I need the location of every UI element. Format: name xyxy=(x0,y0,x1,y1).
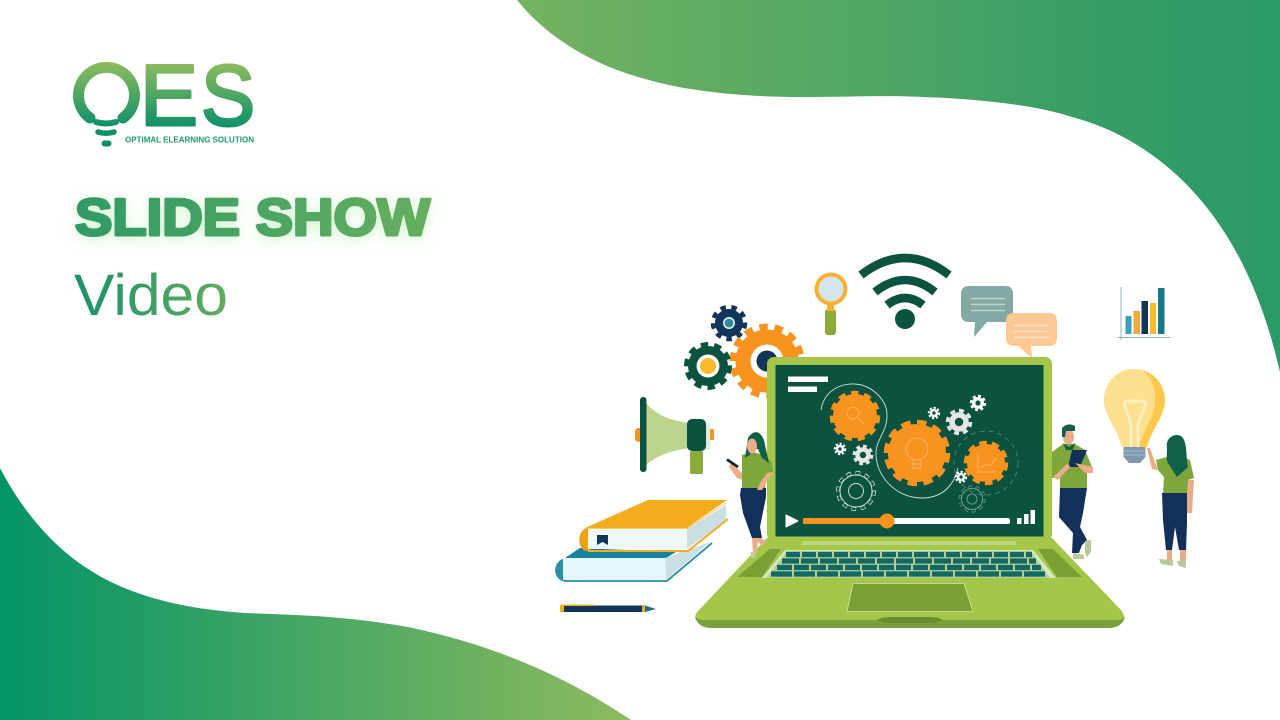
logo letters S: S xyxy=(201,48,255,144)
laptop keyboard xyxy=(762,550,1056,578)
title: SLIDE SHOW xyxy=(75,189,431,247)
icon: wifi xyxy=(861,258,949,329)
icon: orange speech bubble xyxy=(1006,313,1057,358)
video play icon xyxy=(786,515,798,527)
illustration xyxy=(555,258,1194,628)
screen heading lines xyxy=(788,376,828,392)
laptop xyxy=(695,357,1125,628)
lower book xyxy=(555,542,712,582)
figure: woman pointing at bulb xyxy=(1147,435,1194,568)
laptop screen xyxy=(776,365,1044,536)
icon: megaphone xyxy=(635,397,714,474)
laptop trackpad xyxy=(847,584,973,612)
screen outline gear: light xyxy=(838,473,874,509)
icon: magnifier xyxy=(816,274,846,335)
pen xyxy=(560,604,656,612)
screen connector curve xyxy=(821,384,958,498)
icon: navy gear xyxy=(713,307,745,339)
screen gear ring xyxy=(954,431,1018,495)
screen orange gear: search xyxy=(832,393,878,439)
screen outline gear: dark xyxy=(960,487,984,511)
icon: book stack xyxy=(555,500,728,612)
logo tagline: OPTIMAL ELEARNING SOLUTION xyxy=(125,134,254,144)
bookmark xyxy=(597,535,608,545)
icon: bar chart xyxy=(1118,287,1170,340)
icon: large orange gear xyxy=(733,327,801,395)
subtitle: Video xyxy=(74,263,228,328)
logo bulb mark xyxy=(79,67,135,144)
icon: grey speech bubble xyxy=(961,286,1013,337)
screen orange gear: chart xyxy=(966,443,1006,483)
video signal bars xyxy=(1017,510,1035,524)
upper book xyxy=(579,500,728,551)
laptop deck xyxy=(695,538,1125,628)
background wave: top right xyxy=(517,0,1280,372)
figure: man with tablet xyxy=(1052,424,1093,559)
background wave: bottom left xyxy=(0,468,631,720)
logo letters: E xyxy=(140,48,198,144)
icon: dark green gear xyxy=(686,344,730,388)
screen orange gear: bulb xyxy=(886,422,948,484)
video progress bar xyxy=(803,514,1010,528)
screen small gears xyxy=(835,396,985,482)
icon: light bulb xyxy=(1104,369,1165,463)
laptop screen bezel xyxy=(767,357,1052,541)
logo: OES xyxy=(79,48,255,144)
figure: woman with phone xyxy=(727,432,773,558)
